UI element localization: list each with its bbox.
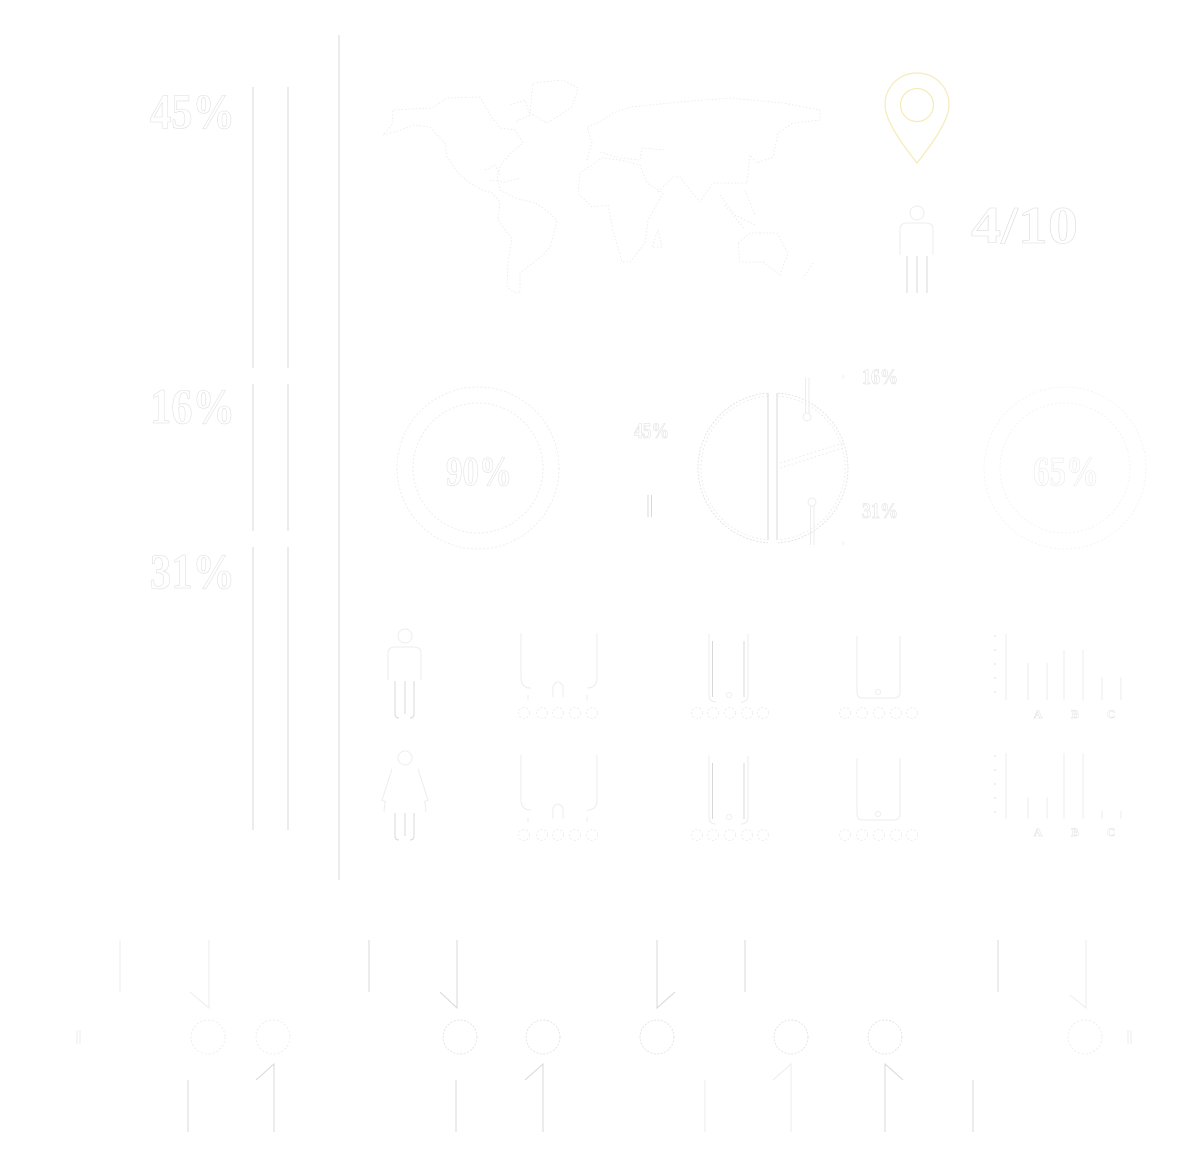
icon: tablet with rating (518, 755, 598, 840)
main vertical divider (338, 35, 340, 880)
bar chart: women: C (1107, 825, 1115, 839)
donut chart: 65%: 65% (1033, 448, 1099, 494)
timeline node 6 (705, 1020, 808, 1132)
label: 45%: 45% (634, 418, 669, 443)
icon: pin centre ring (900, 88, 934, 122)
bar chart: men: C (1107, 707, 1115, 721)
stat: 31%: 31% (150, 543, 235, 599)
stat: 31% (150, 543, 288, 830)
timeline node 3 (369, 940, 477, 1054)
bar chart: men: A (1034, 707, 1043, 721)
icon: man (388, 629, 421, 718)
donut chart: 90%: 90% (446, 448, 512, 494)
timeline node 7 (868, 1020, 973, 1132)
timeline node 5 (640, 940, 745, 1054)
stat: 16% (150, 378, 288, 531)
stat: 16%: 16% (150, 378, 235, 434)
icon: phone with rating (692, 634, 768, 718)
timeline node 8 (998, 940, 1102, 1054)
row: women (382, 751, 1121, 840)
timeline stub left (77, 1030, 80, 1044)
icon: woman (382, 751, 428, 840)
icon: handheld with rating (840, 636, 918, 718)
leader: 16% (803, 375, 843, 421)
bar chart: women (995, 753, 1121, 839)
timeline node 2 (188, 1020, 290, 1132)
bar chart: men (995, 634, 1121, 721)
leader line for 45% (648, 495, 652, 517)
pie chart with leaders (698, 375, 848, 545)
donut chart: 65% (984, 387, 1146, 549)
stat: 45% (150, 83, 288, 368)
donut chart: 90% (397, 387, 559, 549)
bar chart: men: B (1071, 707, 1079, 721)
timeline (77, 940, 1131, 1132)
icon: tablet with rating (518, 633, 598, 718)
bar chart: women: A (1034, 825, 1043, 839)
timeline node 4 (456, 1020, 560, 1132)
bar chart: women: B (1071, 825, 1079, 839)
stacked bar: 45 percent, 16 percent, 31 percent (150, 83, 288, 830)
timeline node 1 (120, 940, 225, 1054)
icon: phone with rating (692, 756, 768, 840)
row: men (388, 629, 1121, 721)
icon: person (900, 206, 933, 293)
world map (383, 80, 820, 293)
leader: 31% (808, 498, 843, 545)
label: 31%: 31% (862, 498, 898, 523)
label: 16%: 16% (862, 364, 898, 389)
timeline stub right (1128, 1030, 1131, 1044)
icon: handheld with rating (840, 758, 918, 840)
stat: 4 of 10: 4/10 (971, 197, 1078, 255)
icon: location pin (885, 73, 949, 163)
stat: 45%: 45% (150, 83, 235, 139)
